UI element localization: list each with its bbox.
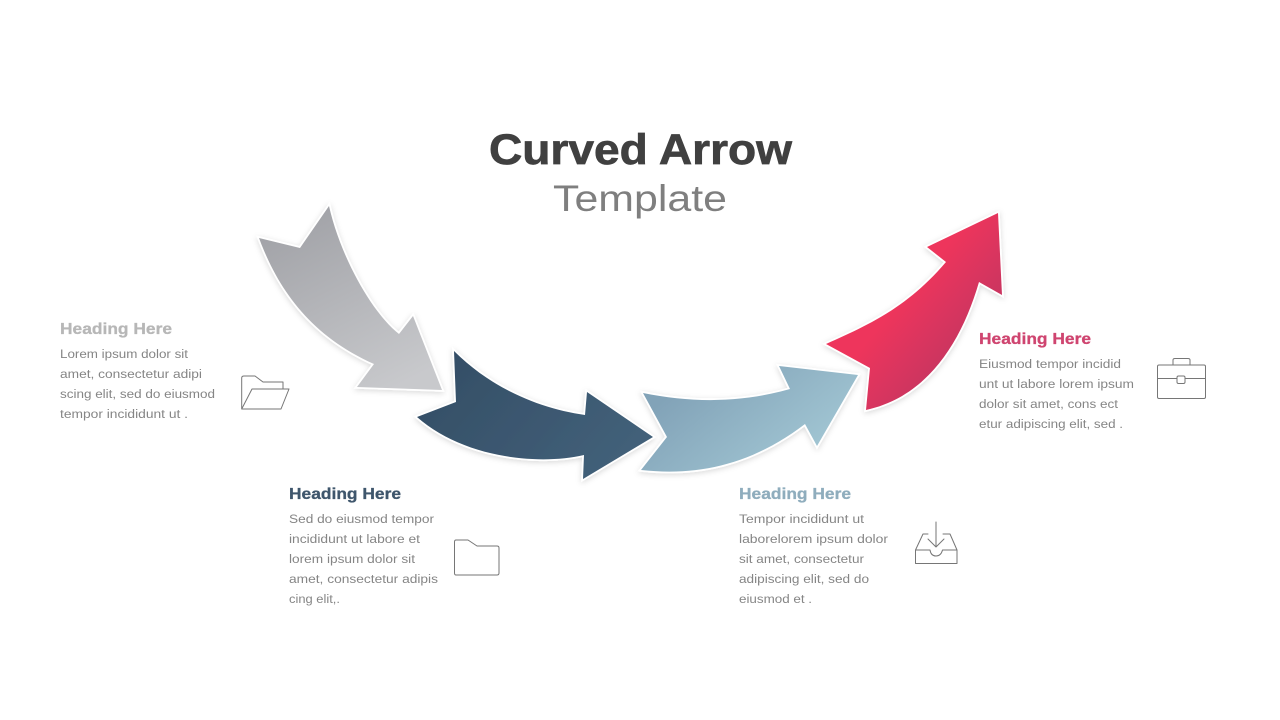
arrow: step 2 navy bbox=[417, 351, 653, 479]
text block: step 3 bbox=[739, 486, 888, 606]
text block: step 4: dolor sit amet, cons ect bbox=[979, 397, 1119, 411]
arrow: step 1 gray bbox=[259, 206, 442, 390]
text block: step 1 bbox=[60, 321, 215, 421]
text block: step 2: Sed do eiusmod tempor bbox=[289, 512, 434, 526]
title: Template bbox=[553, 178, 727, 219]
icon: briefcase bbox=[1158, 358, 1206, 398]
text block: step 1: Lorem ipsum dolor sit bbox=[60, 347, 189, 361]
text block: step 4: Eiusmod tempor incidid bbox=[979, 357, 1121, 371]
text block: step 3: Heading Here bbox=[739, 486, 851, 503]
text block: step 4: Heading Here bbox=[979, 331, 1091, 348]
text block: step 1: tempor incididunt ut . bbox=[60, 407, 188, 421]
text block: step 4: etur adipiscing elit, sed . bbox=[979, 417, 1123, 431]
text block: step 3: eiusmod et . bbox=[739, 592, 812, 606]
text block: step 1: Heading Here bbox=[60, 321, 172, 338]
text block: step 1: amet, consectetur adipi bbox=[60, 367, 202, 381]
icon: open folder bbox=[242, 376, 289, 409]
text block: step 2 bbox=[289, 486, 438, 606]
text block: step 2: amet, consectetur adipis bbox=[289, 572, 438, 586]
text block: step 2: lorem ipsum dolor sit bbox=[289, 552, 416, 566]
title: Curved Arrow bbox=[489, 126, 793, 174]
icon: folder bbox=[454, 540, 499, 575]
icon: inbox tray bbox=[916, 522, 957, 564]
text block: step 3: Tempor incididunt ut bbox=[739, 512, 865, 526]
text block: step 2: Heading Here bbox=[289, 486, 401, 503]
text block: step 2: cing elit,. bbox=[289, 592, 340, 606]
text block: step 3: laborelorem ipsum dolor bbox=[739, 532, 888, 546]
arrow: step 3 light blue bbox=[641, 366, 858, 472]
arrow: step 4 red bbox=[826, 213, 1002, 410]
text block: step 3: adipiscing elit, sed do bbox=[739, 572, 869, 586]
text block: step 4 bbox=[979, 331, 1134, 431]
text block: step 4: unt ut labore lorem ipsum bbox=[979, 377, 1134, 391]
title bbox=[489, 126, 793, 219]
text block: step 3: sit amet, consectetur bbox=[739, 552, 864, 566]
text block: step 1: scing elit, sed do eiusmod bbox=[60, 387, 215, 401]
text block: step 2: incididunt ut labore et bbox=[289, 532, 421, 546]
